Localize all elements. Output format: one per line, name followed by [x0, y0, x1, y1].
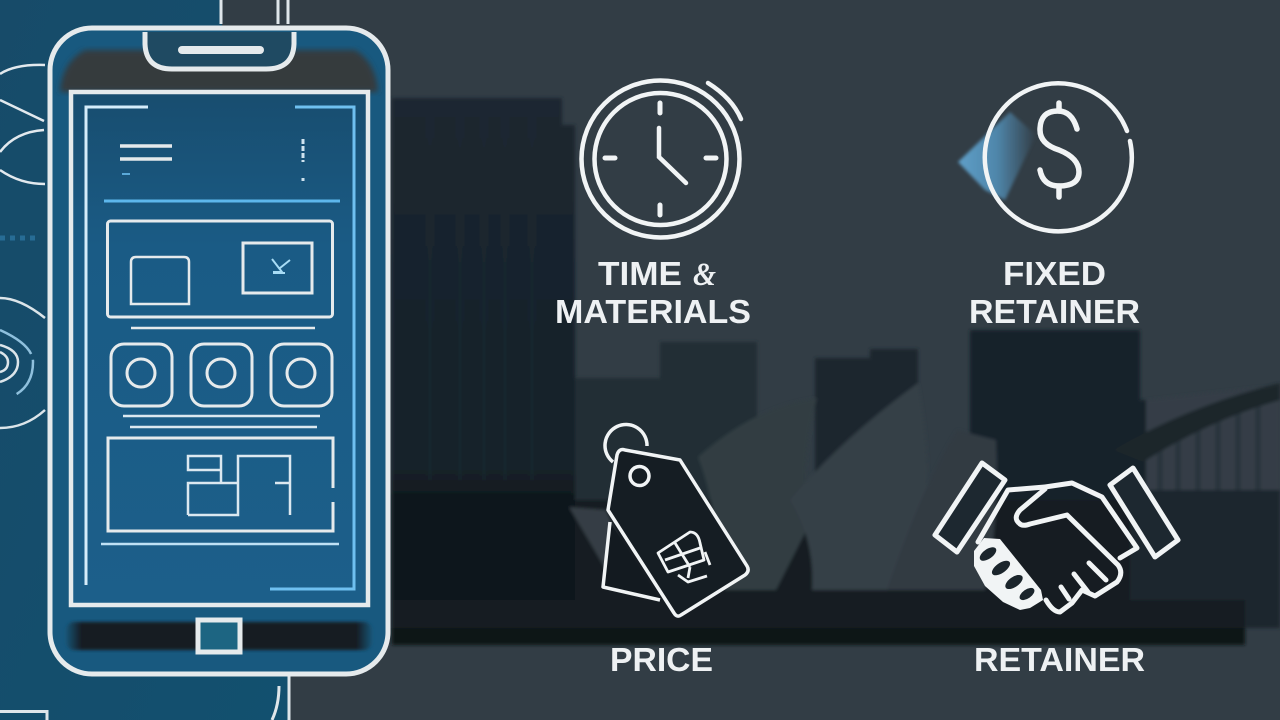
top card	[108, 221, 332, 317]
mid buildings	[575, 342, 757, 620]
maze glyph	[188, 456, 290, 515]
bridge arch	[1113, 383, 1280, 462]
card image left	[131, 257, 189, 304]
card image glyph	[272, 259, 290, 273]
phone top bezel	[60, 50, 378, 92]
icon: price tags	[603, 425, 748, 616]
bottom connector lines	[272, 676, 289, 720]
text lines	[123, 416, 320, 427]
icon buttons row	[111, 344, 332, 406]
item: time and materials	[555, 80, 751, 330]
decorative eye shape	[0, 65, 45, 184]
opera house sails	[698, 398, 817, 590]
screen blue frame	[86, 107, 354, 589]
harbour base	[392, 600, 1245, 628]
icon: handshake	[935, 463, 1178, 612]
card image right	[243, 243, 312, 293]
label: time and materials: TIME	[598, 255, 682, 292]
bridge deck	[1146, 385, 1280, 495]
label: fixed retainer	[969, 255, 1140, 330]
label: fixed retainer: RETAINER	[969, 293, 1140, 330]
speaker notch	[145, 32, 294, 69]
blue left panel	[0, 0, 288, 720]
phone body	[50, 28, 388, 674]
label: fixed retainer: FIXED	[1003, 255, 1106, 292]
label: retainer: RETAINER	[974, 641, 1145, 678]
button one	[111, 344, 172, 406]
decorative dotted band	[0, 236, 38, 240]
left hand fingers	[974, 538, 1043, 610]
icon: dollar coin	[958, 83, 1132, 231]
corner box fragment	[0, 712, 47, 720]
label: price: PRICE	[610, 641, 713, 678]
item: fixed retainer	[958, 83, 1140, 330]
label: time and materials: &	[693, 257, 716, 293]
header divider	[104, 200, 340, 202]
right tower	[970, 330, 1146, 620]
item: retainer	[935, 463, 1178, 678]
hamburger menu	[120, 146, 172, 159]
top connector lines	[221, 0, 288, 24]
bottom card	[108, 438, 333, 531]
decorative concentric rings	[0, 298, 45, 428]
home button	[198, 620, 240, 652]
label: time and materials	[555, 255, 751, 330]
lower divider	[101, 543, 339, 545]
tall tower	[392, 98, 575, 640]
status dots	[302, 139, 304, 181]
speaker pill	[178, 46, 264, 54]
phone bottom bezel	[66, 622, 372, 650]
tower stripes	[430, 110, 532, 480]
phone illustration	[50, 28, 388, 674]
label: time and materials: MATERIALS	[555, 293, 751, 330]
divider under card	[131, 327, 315, 329]
phone screen	[71, 92, 368, 605]
lower harbour darkness	[575, 500, 1130, 630]
button three	[271, 344, 332, 406]
skyline silhouette	[392, 98, 1280, 645]
icon: clock	[582, 80, 741, 238]
button two	[191, 344, 252, 406]
item: price	[603, 425, 748, 678]
